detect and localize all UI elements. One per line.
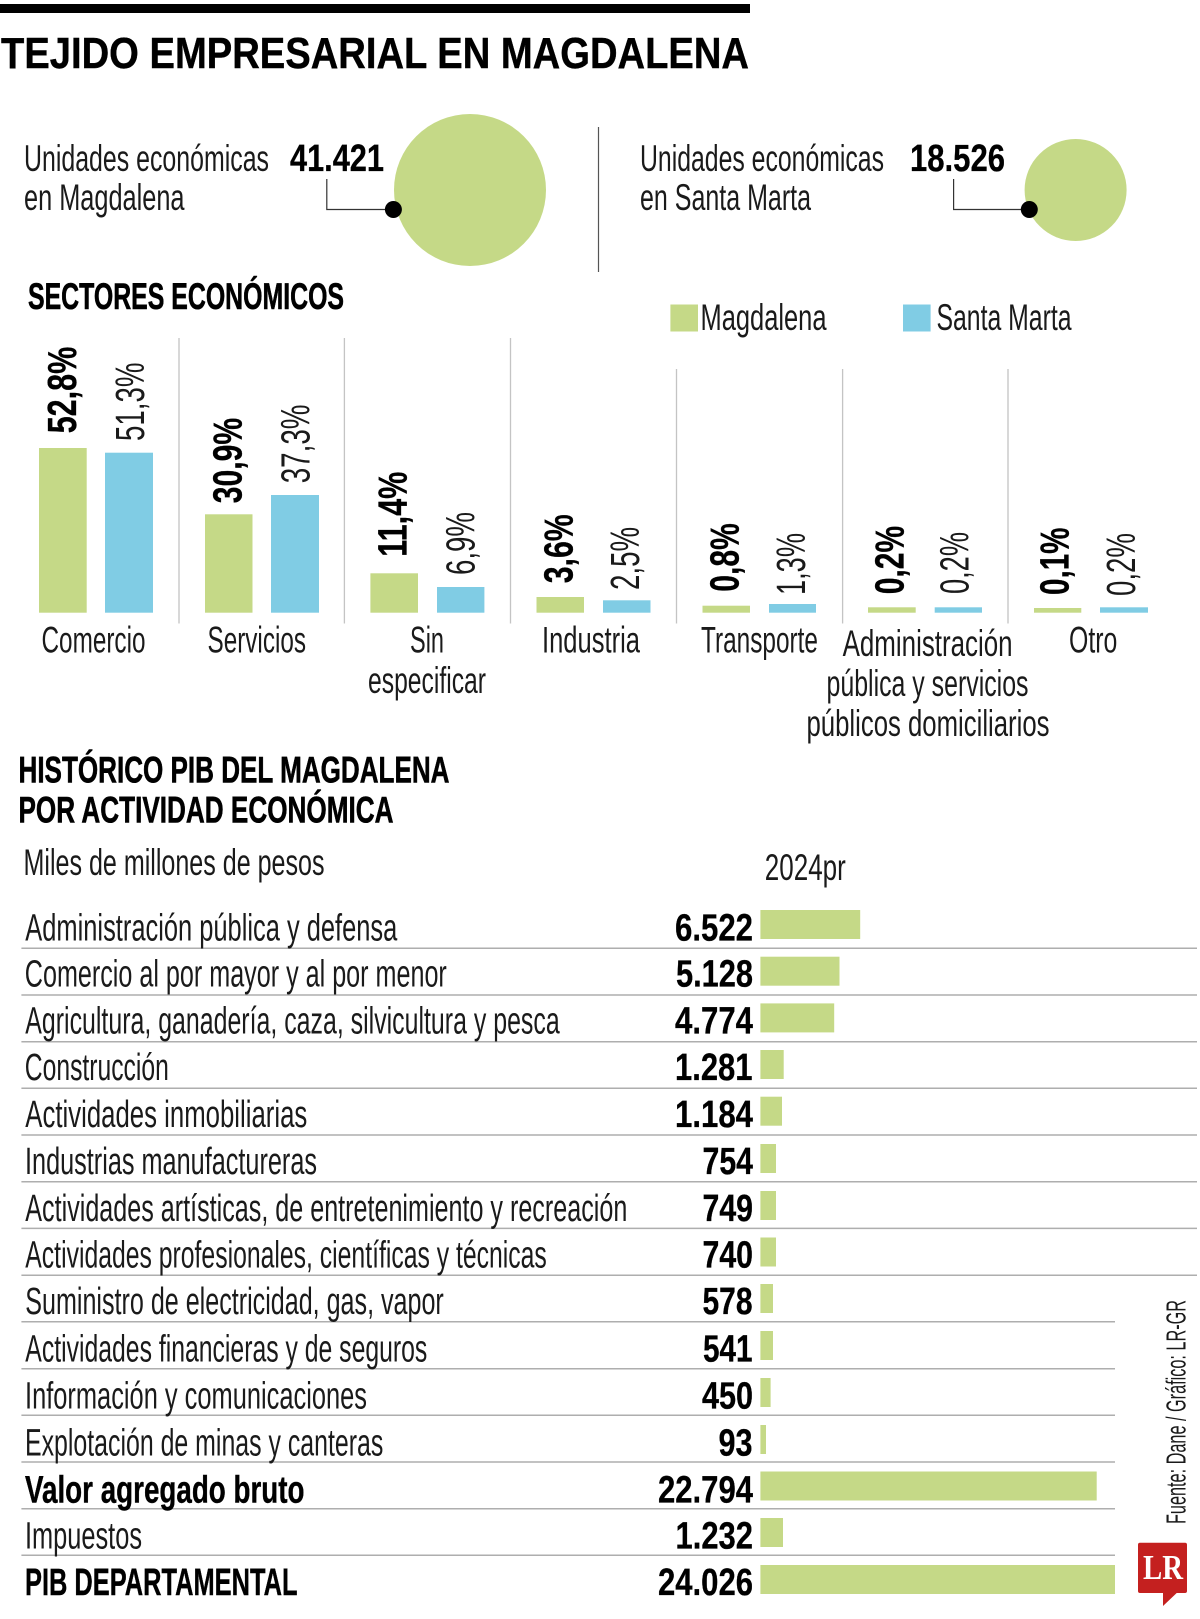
row: Impuestos: 1.232 bbox=[676, 1515, 753, 1557]
row: Valor agregado bruto: Valor agregado bruto bbox=[25, 1469, 304, 1511]
icon: LR logo bbox=[1138, 1543, 1187, 1606]
bars: Transporte: 1,3% bbox=[768, 533, 814, 595]
bars: Sin especificar: Sin bbox=[410, 620, 444, 661]
title bbox=[0, 4, 750, 78]
text: year: 2024pr bbox=[765, 847, 846, 888]
bars: Servicios: 37,3% bbox=[272, 404, 318, 483]
row: Actividades profesionales: Actividades profesionales, científicas y técnicas bbox=[25, 1235, 547, 1277]
bars: Industria bbox=[535, 514, 650, 661]
bars: Comercio bbox=[39, 347, 153, 661]
row: Industrias manufactureras: 754 bbox=[702, 1141, 753, 1183]
bars: Sin especificar: especificar bbox=[368, 660, 486, 701]
row: Explotación de minas: 93 bbox=[718, 1422, 752, 1464]
row: Información y comunicaciones: 450 bbox=[702, 1376, 753, 1418]
leader line bbox=[954, 179, 1038, 218]
table chart: PIB por actividad bbox=[25, 908, 1115, 1604]
row: Industrias manufactureras: Industrias manufactureras bbox=[25, 1141, 317, 1183]
leader line bbox=[327, 179, 402, 218]
text: units Santa Marta label: en Santa Marta bbox=[640, 177, 811, 218]
bars: Industria: 3,6% bbox=[535, 514, 581, 583]
legend: Santa Marta bbox=[936, 297, 1072, 338]
bars: Otro: Otro bbox=[1069, 620, 1117, 661]
bars: Servicios: 30,9% bbox=[204, 418, 250, 503]
bar chart: sectores económicos bbox=[39, 347, 1148, 744]
row: Suministro de electricidad: 578 bbox=[702, 1281, 752, 1323]
bars: Sin especificar: 6,9% bbox=[438, 512, 484, 575]
bars: Administración pública bbox=[806, 526, 1050, 744]
bars: Transporte: Transporte bbox=[701, 620, 818, 661]
row: PIB departamental: PIB DEPARTAMENTAL bbox=[25, 1562, 298, 1604]
row: Comercio al por mayor y al por menor: 5.128 bbox=[676, 954, 753, 996]
row: Impuestos bbox=[25, 1515, 783, 1557]
bars: Servicios: Servicios bbox=[208, 620, 306, 661]
row: Impuestos: Impuestos bbox=[25, 1515, 142, 1557]
text: units Santa Marta label: Unidades económicas bbox=[640, 138, 884, 179]
icon: LR logo: LR bbox=[1143, 1548, 1184, 1587]
text: units Magdalena label: en Magdalena bbox=[24, 177, 185, 218]
panel: units in Magdalena bbox=[24, 114, 546, 266]
row: Agricultura: 4.774 bbox=[675, 1000, 753, 1042]
row: PIB departamental bbox=[25, 1562, 1115, 1604]
text: unit note: Miles de millones de pesos bbox=[24, 842, 324, 883]
row: Actividades financieras: Actividades financieras y de seguros bbox=[25, 1328, 427, 1370]
bars: Otro: 0,1% bbox=[1031, 528, 1077, 595]
row: Actividades inmobiliarias: Actividades inmobiliarias bbox=[25, 1094, 307, 1136]
bars: Administración pública: 0,2% bbox=[866, 526, 912, 594]
bars: Servicios bbox=[204, 404, 319, 661]
row: Explotación de minas: Explotación de minas y canteras bbox=[25, 1422, 383, 1464]
heading: sectores económicos: SECTORES ECONÓMICOS bbox=[28, 275, 344, 317]
row: Actividades artísticas: Actividades artísticas, de entretenimiento y recreación bbox=[25, 1188, 627, 1230]
heading: histórico PIB: POR ACTIVIDAD ECONÓMICA bbox=[18, 788, 394, 830]
bars: Sin especificar bbox=[368, 472, 486, 701]
heading: histórico PIB: HISTÓRICO PIB DEL MAGDALENA bbox=[18, 748, 450, 790]
row: Información y comunicaciones: Información y comunicaciones bbox=[25, 1376, 367, 1418]
bars: Transporte bbox=[701, 523, 818, 661]
bars: Comercio: 51,3% bbox=[107, 362, 153, 441]
circle: Santa Marta bbox=[1025, 139, 1127, 241]
bars: Comercio: 52,8% bbox=[39, 347, 85, 433]
bars: Industria: 2,5% bbox=[602, 527, 648, 590]
bars: Otro bbox=[1031, 528, 1148, 661]
row: Información y comunicaciones bbox=[25, 1376, 771, 1418]
bars: Administración pública: pública y servicios bbox=[826, 663, 1028, 704]
legend: Magdalena bbox=[700, 297, 827, 338]
row: Actividades artísticas: 749 bbox=[702, 1188, 753, 1230]
bars: Comercio: Comercio bbox=[42, 620, 146, 661]
row: Actividades inmobiliarias bbox=[25, 1094, 782, 1136]
row: Administración pública y defensa bbox=[25, 908, 860, 950]
bars: Transporte: 0,8% bbox=[702, 523, 748, 592]
title: TEJIDO EMPRESARIAL EN MAGDALENA bbox=[1, 30, 749, 78]
row: Agricultura: Agricultura, ganadería, caza, silvicultura y pesca bbox=[25, 1000, 560, 1042]
row: Valor agregado bruto bbox=[25, 1469, 1097, 1511]
row: Actividades inmobiliarias: 1.184 bbox=[675, 1094, 753, 1136]
text: units Magdalena label: Unidades económicas bbox=[24, 138, 269, 179]
row: Administración pública y defensa: Administración pública y defensa bbox=[25, 908, 398, 950]
source credit: Fuente: Dane / Gráfico: LR-GR bbox=[1160, 1300, 1192, 1524]
row: Construcción: Construcción bbox=[25, 1047, 169, 1089]
circle: Magdalena bbox=[394, 114, 546, 266]
row: Industrias manufactureras bbox=[25, 1141, 776, 1183]
row: Construcción: 1.281 bbox=[675, 1047, 752, 1089]
row: Actividades financieras: 541 bbox=[703, 1328, 752, 1370]
bars: Sin especificar: 11,4% bbox=[370, 472, 416, 557]
row: Actividades profesionales: 740 bbox=[702, 1235, 753, 1277]
bars: Industria: Industria bbox=[542, 620, 640, 661]
panel: units in Santa Marta bbox=[640, 138, 1127, 241]
legend bbox=[670, 297, 1072, 338]
bars: Administración pública: Administración bbox=[843, 623, 1013, 664]
number: 41.421: 41.421 bbox=[290, 138, 384, 180]
bars: Otro: 0,2% bbox=[1098, 533, 1144, 596]
row: Suministro de electricidad: Suministro de electricidad, gas, vapor bbox=[25, 1281, 444, 1323]
row: Comercio al por mayor y al por menor: Comercio al por mayor y al por menor bbox=[25, 954, 447, 996]
bars: Administración pública: 0,2% bbox=[931, 532, 977, 594]
bars: Administración pública: públicos domiciliarios bbox=[806, 703, 1050, 744]
row: PIB departamental: 24.026 bbox=[658, 1562, 753, 1604]
row: Construcción bbox=[25, 1047, 784, 1089]
number: 18.526: 18.526 bbox=[910, 138, 1005, 180]
row: Valor agregado bruto: 22.794 bbox=[658, 1469, 753, 1511]
row: Administración pública y defensa: 6.522 bbox=[675, 908, 753, 950]
